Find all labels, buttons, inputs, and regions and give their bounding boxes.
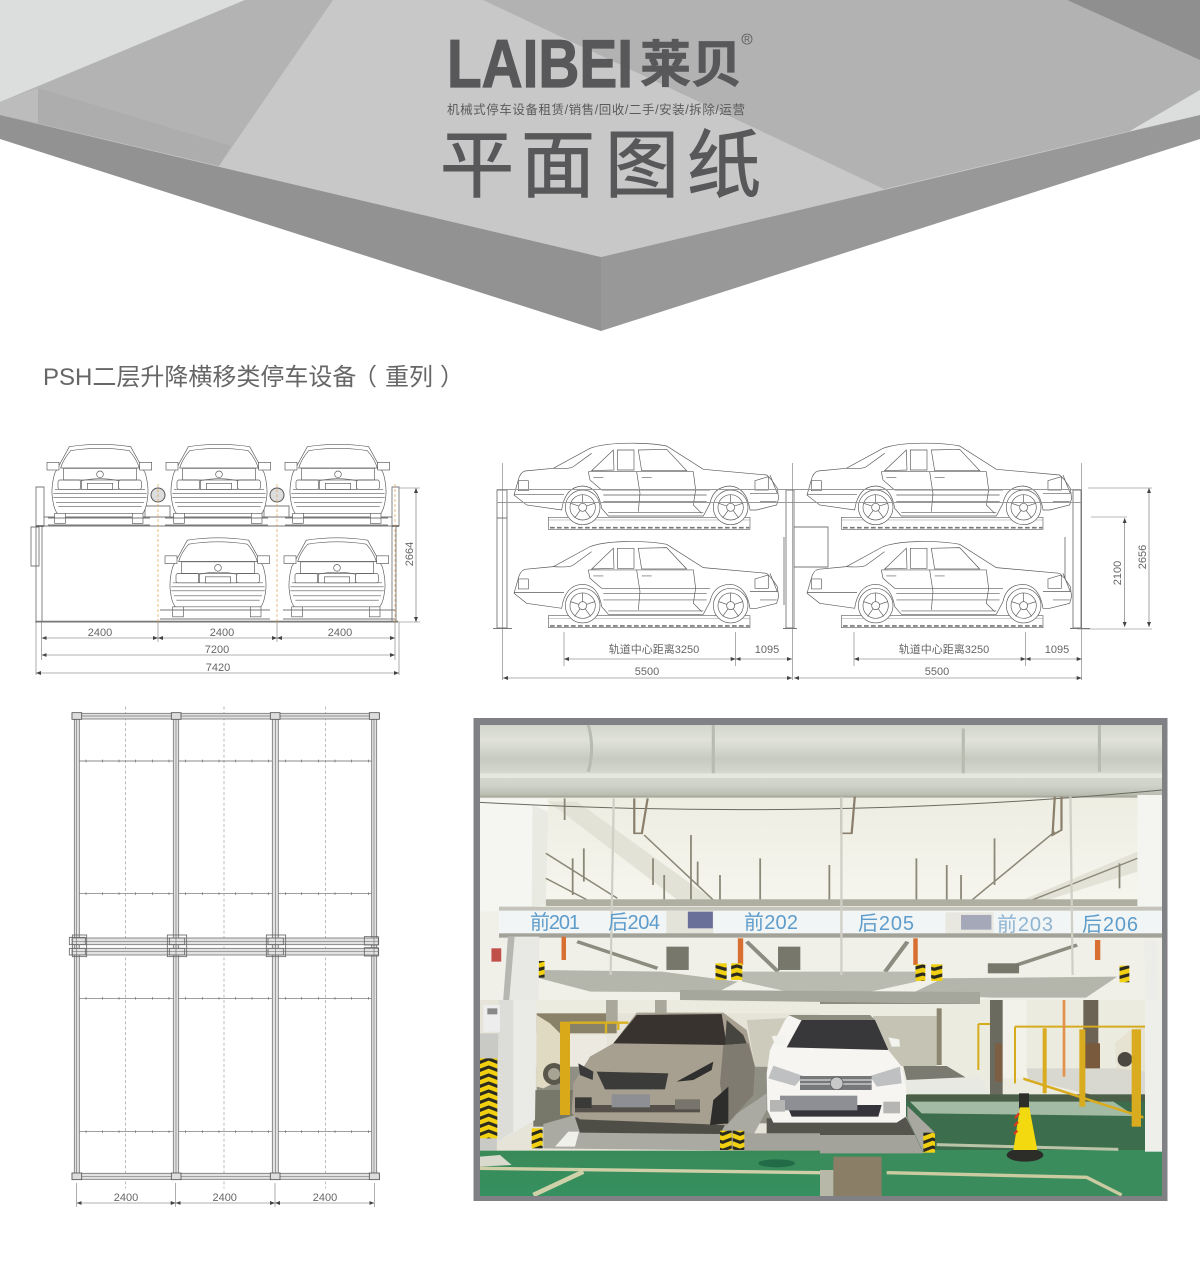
logo: LAIBEI 莱贝: LAIBEI [447,26,633,102]
photo frame [474,718,1168,1201]
frame: columns and beams [31,487,399,622]
title: 平面图纸 [440,124,761,207]
dimensions: 1095 [755,644,779,656]
header: faceted grey banner [0,0,1200,331]
photo lower-left: grey car [480,1000,820,1200]
logo: LAIBEI 莱贝: R [744,35,750,44]
dimensions: 2656 [1137,545,1149,569]
lower row cars [165,538,389,617]
plan dimensions: 2400 [212,1192,237,1204]
photo lower-right: white car, cone and fences [767,1000,1167,1198]
side elevation drawing [493,443,1152,680]
dimensions: 轨道中心距离3250 [609,642,699,656]
plan dimensions: 2400 [114,1192,138,1204]
section heading: （ [353,364,377,391]
beams crossing the upper cars [497,490,1081,502]
section heading: PSH二层升降横移类停车设备 [43,364,356,391]
pallets [48,518,395,619]
dimensions: 7420 [206,662,230,674]
photo upper: ceiling, duct, sign and lift machinery [480,725,1162,1000]
photo: parking installation [470,722,1170,1200]
section heading: 重列 [385,364,433,391]
dimensions: 轨道中心距离3250 [899,642,989,656]
dimensions: 5500 [635,666,659,678]
plan dimensions [77,1183,374,1207]
dimensions: 2400 [210,627,234,639]
sign labels in photo: 前202 [744,911,798,934]
dimensions: 2664 [404,542,416,566]
photo: second level pallets [680,990,980,1004]
dimensions: 2100 [1112,561,1124,585]
sign labels in photo: 前203 [997,913,1053,936]
sign labels in photo: 后204 [608,911,660,934]
plan view drawing [69,707,379,1207]
sign labels in photo: 后205 [858,912,914,935]
dimensions: 7200 [205,644,229,656]
dimensions [36,488,420,675]
section heading: ） [440,364,464,391]
frame: columns and beams [493,490,1090,628]
sign labels in photo: 后206 [1082,913,1138,936]
sign labels in photo: 前201 [530,911,580,934]
dimensions: 5500 [925,666,949,678]
sign labels in photo [530,911,1138,936]
dimensions: 1095 [1045,644,1069,656]
orange guide lines [158,484,395,622]
pallets and cars [514,443,1072,628]
upper row cars [47,444,390,523]
plan structure [69,707,379,1188]
front elevation drawing [31,444,420,675]
plan dimensions: 2400 [313,1192,337,1204]
dimensions [502,463,1152,680]
dimensions: 2400 [88,627,112,639]
tagline: 机械式停车设备租赁/销售/回收/二手/安装/拆除/运营 [447,102,745,117]
logo: LAIBEI 莱贝: 莱贝 [640,37,742,93]
dimensions: 2400 [328,627,352,639]
